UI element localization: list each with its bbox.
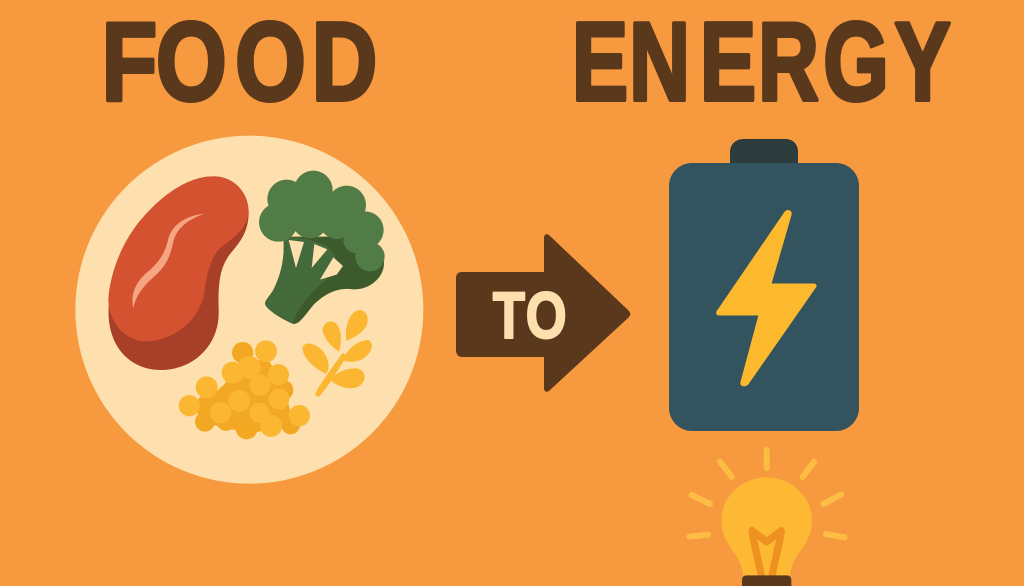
label: TO: TO: [493, 278, 567, 352]
battery cap: [730, 139, 798, 164]
plate: [75, 136, 423, 484]
icon: lightning bolt: [717, 211, 816, 386]
title: ENERGY: ENERGY: [572, 0, 951, 124]
bulb rays: [689, 450, 845, 537]
icon: steak: [108, 176, 249, 370]
icon: lentil pile: [179, 340, 310, 439]
battery body: [669, 163, 859, 431]
arrow: food to energy: [456, 234, 630, 392]
icon: grain sprig: [303, 310, 372, 397]
bulb base: [742, 575, 791, 586]
panel: food plate: [75, 136, 423, 484]
icon: battery: [669, 139, 859, 431]
icon: broccoli: [259, 171, 385, 324]
title: FOOD: FOOD: [102, 0, 377, 124]
bulb glass: [721, 477, 812, 576]
bulb filament: [752, 531, 781, 576]
icon: light bulb: [689, 450, 845, 586]
